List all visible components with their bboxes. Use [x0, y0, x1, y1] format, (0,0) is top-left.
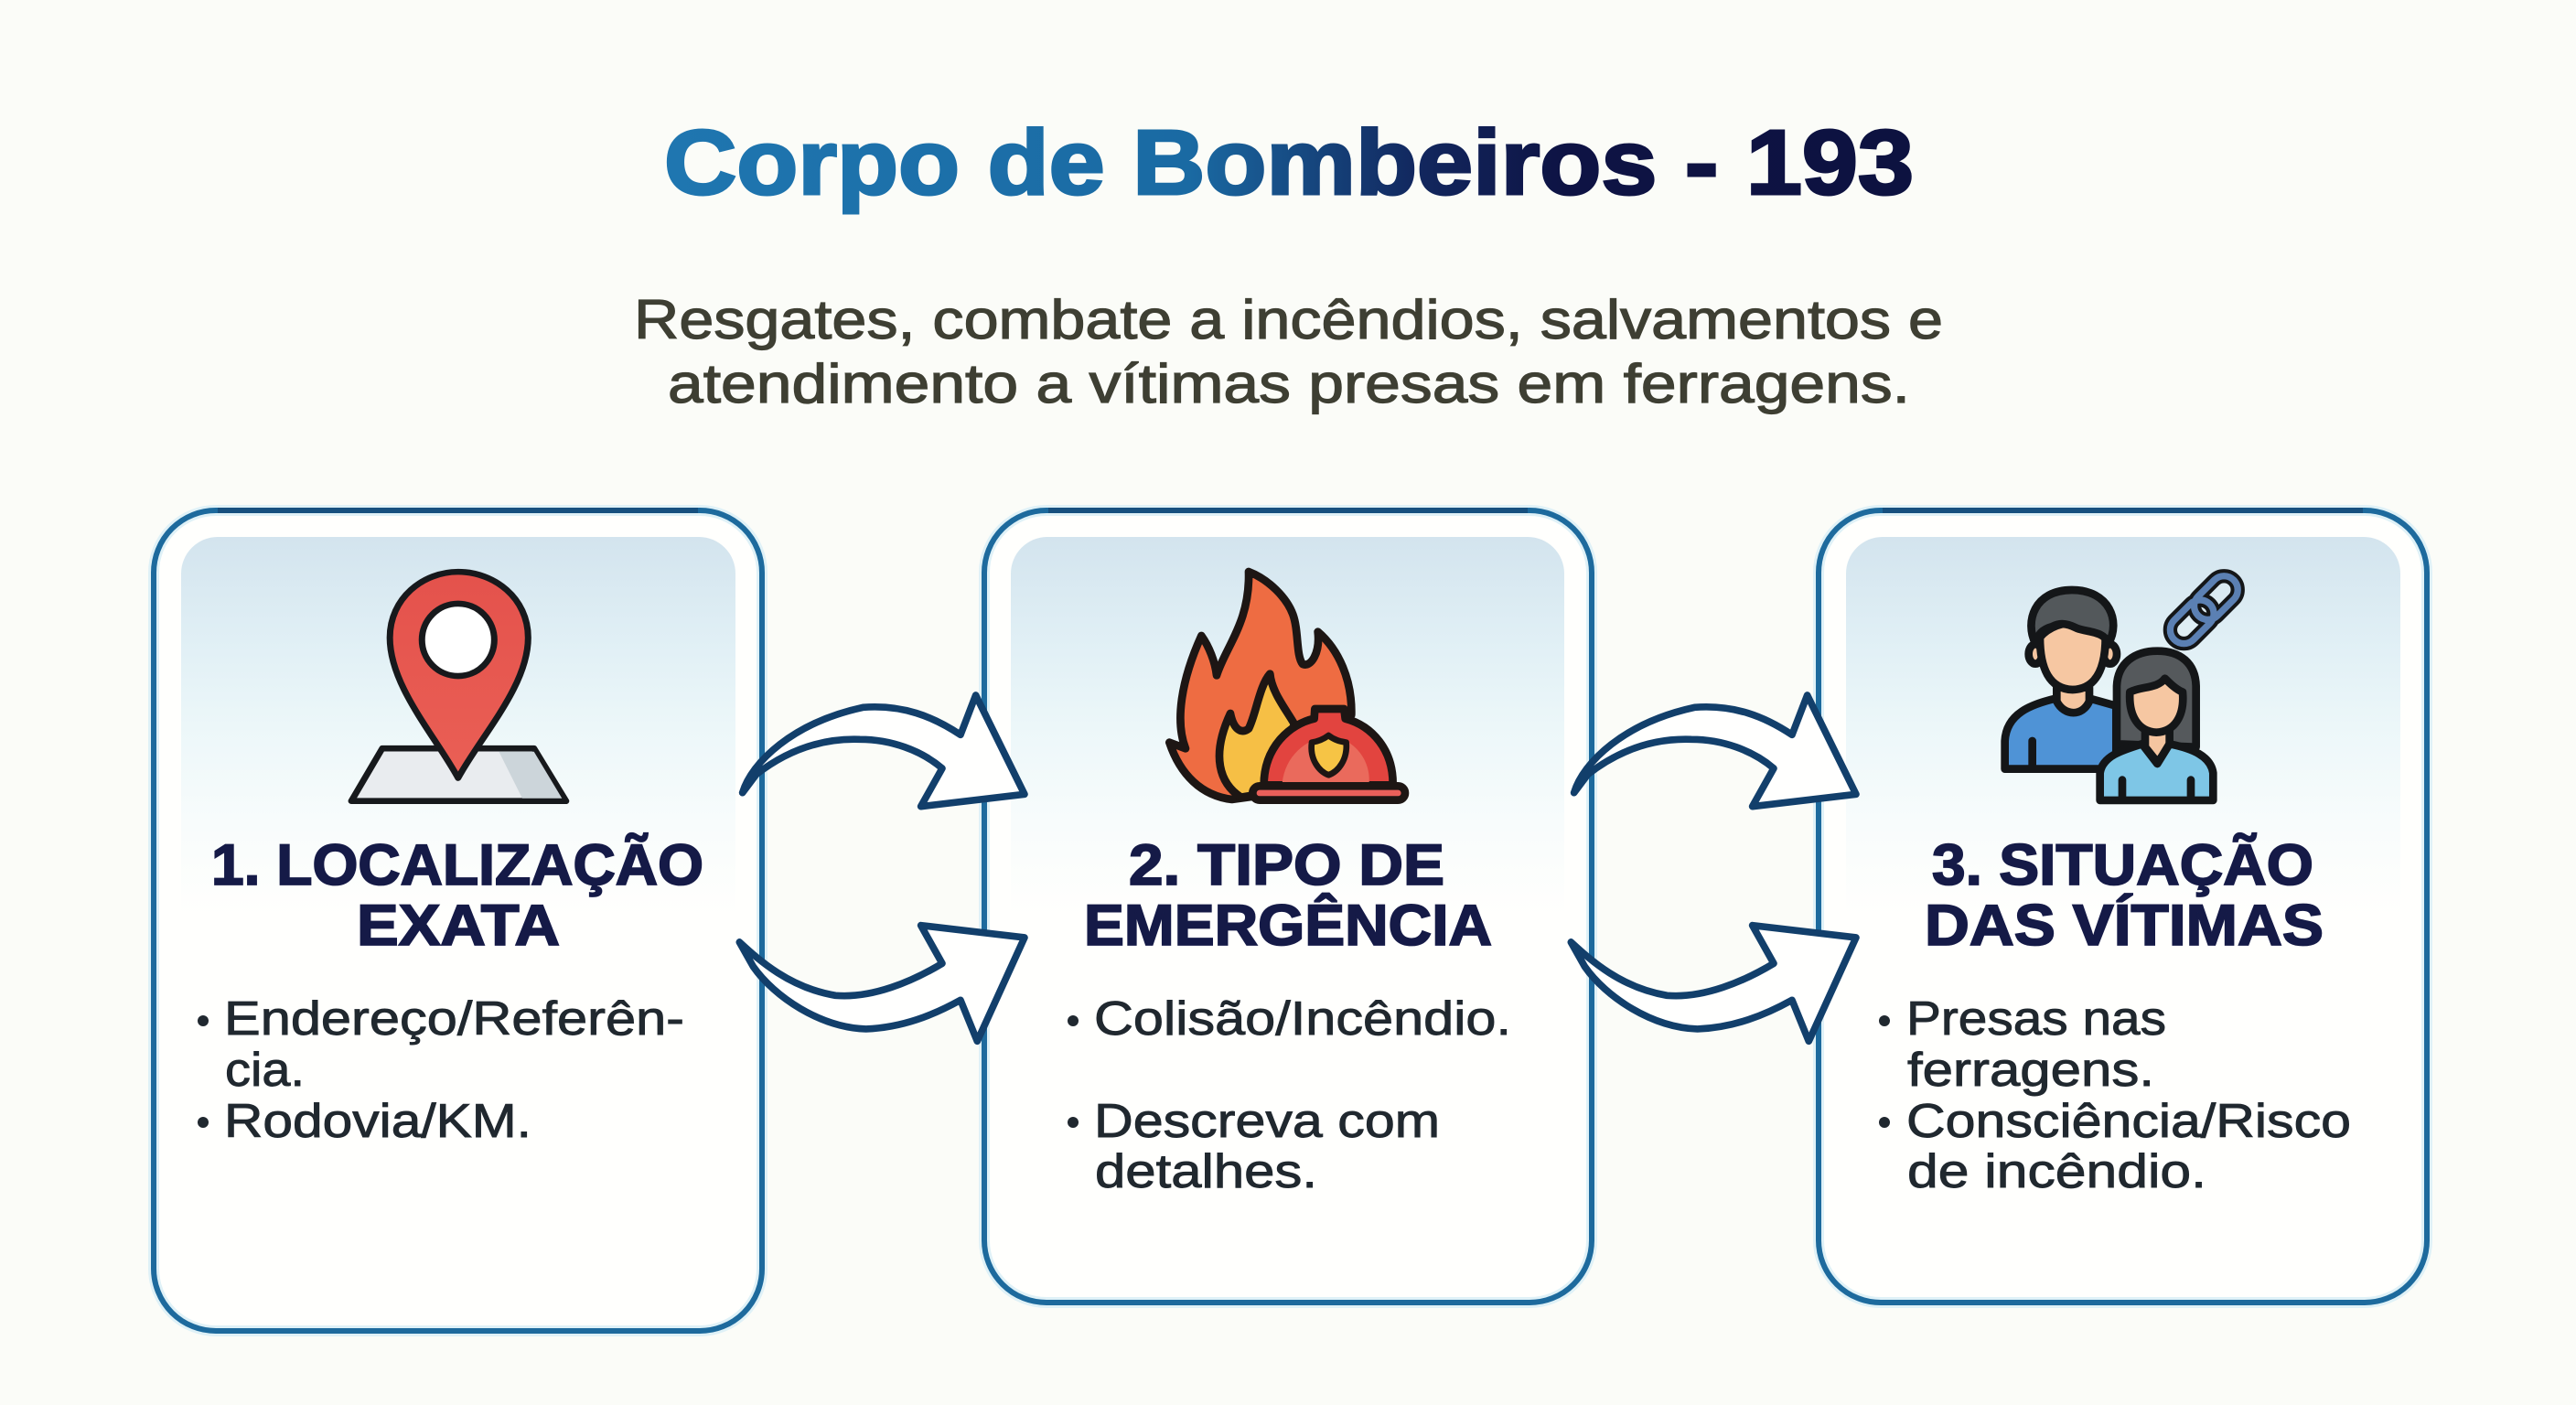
list: vítimas — [1879, 992, 2351, 1198]
subtitle: Resgates, combate a incêndios, salvamentos e — [634, 289, 1943, 350]
list: vítimas: ferragens. — [1907, 1044, 2154, 1097]
arrow: bottom arrow between cards 2 and 3 — [1571, 926, 1856, 1041]
heading: localização exata — [211, 832, 703, 958]
arrow: bottom arrow between cards 1 and 2 — [739, 926, 1025, 1041]
heading: tipo de emergência — [1084, 833, 1492, 958]
heading: tipo de emergência: 2. TIPO DE — [1129, 833, 1444, 897]
panel: localização exata — [154, 510, 762, 1331]
arrow: top arrow between cards 1 and 2 — [743, 695, 1025, 807]
subtitle: atendimento a vítimas presas em ferragens. — [668, 353, 1910, 414]
list: emergência: Colisão/Incêndio. — [1094, 992, 1511, 1046]
heading: localização exata: EXATA — [357, 894, 560, 958]
list: localização — [198, 992, 684, 1148]
panel: tipo de emergência — [984, 510, 1592, 1303]
icon: flames and helmet — [1169, 572, 1405, 800]
list: localização: Rodovia/KM. — [224, 1095, 531, 1148]
icon: location pin on map — [351, 572, 566, 801]
heading: situação das vítimas: 3. SITUAÇÃO — [1932, 832, 2313, 897]
list: localização: cia. — [225, 1044, 305, 1097]
list: emergência: Descreva com — [1094, 1095, 1440, 1148]
heading: situação das vítimas: DAS VÍTIMAS — [1925, 894, 2324, 958]
list: vítimas: de incêndio. — [1907, 1145, 2206, 1198]
icon: two people and chain link — [2005, 571, 2243, 800]
list: emergência: detalhes. — [1095, 1145, 1317, 1198]
list: vítimas: Consciência/Risco — [1906, 1095, 2351, 1148]
list: localização: Endereço/Referên- — [224, 992, 684, 1046]
list: emergência — [1068, 992, 1511, 1198]
arrow: top arrow between cards 2 and 3 — [1574, 695, 1856, 807]
list: vítimas: Presas nas — [1906, 992, 2166, 1046]
heading: tipo de emergência: EMERGÊNCIA — [1084, 893, 1492, 958]
title: Corpo de Bombeiros - 193 — [664, 112, 1914, 214]
subtitle — [634, 289, 1943, 414]
panel: situação das vítimas — [1819, 510, 2427, 1303]
heading: situação das vítimas — [1925, 832, 2324, 958]
heading: localização exata: 1. LOCALIZAÇÃO — [211, 832, 703, 897]
